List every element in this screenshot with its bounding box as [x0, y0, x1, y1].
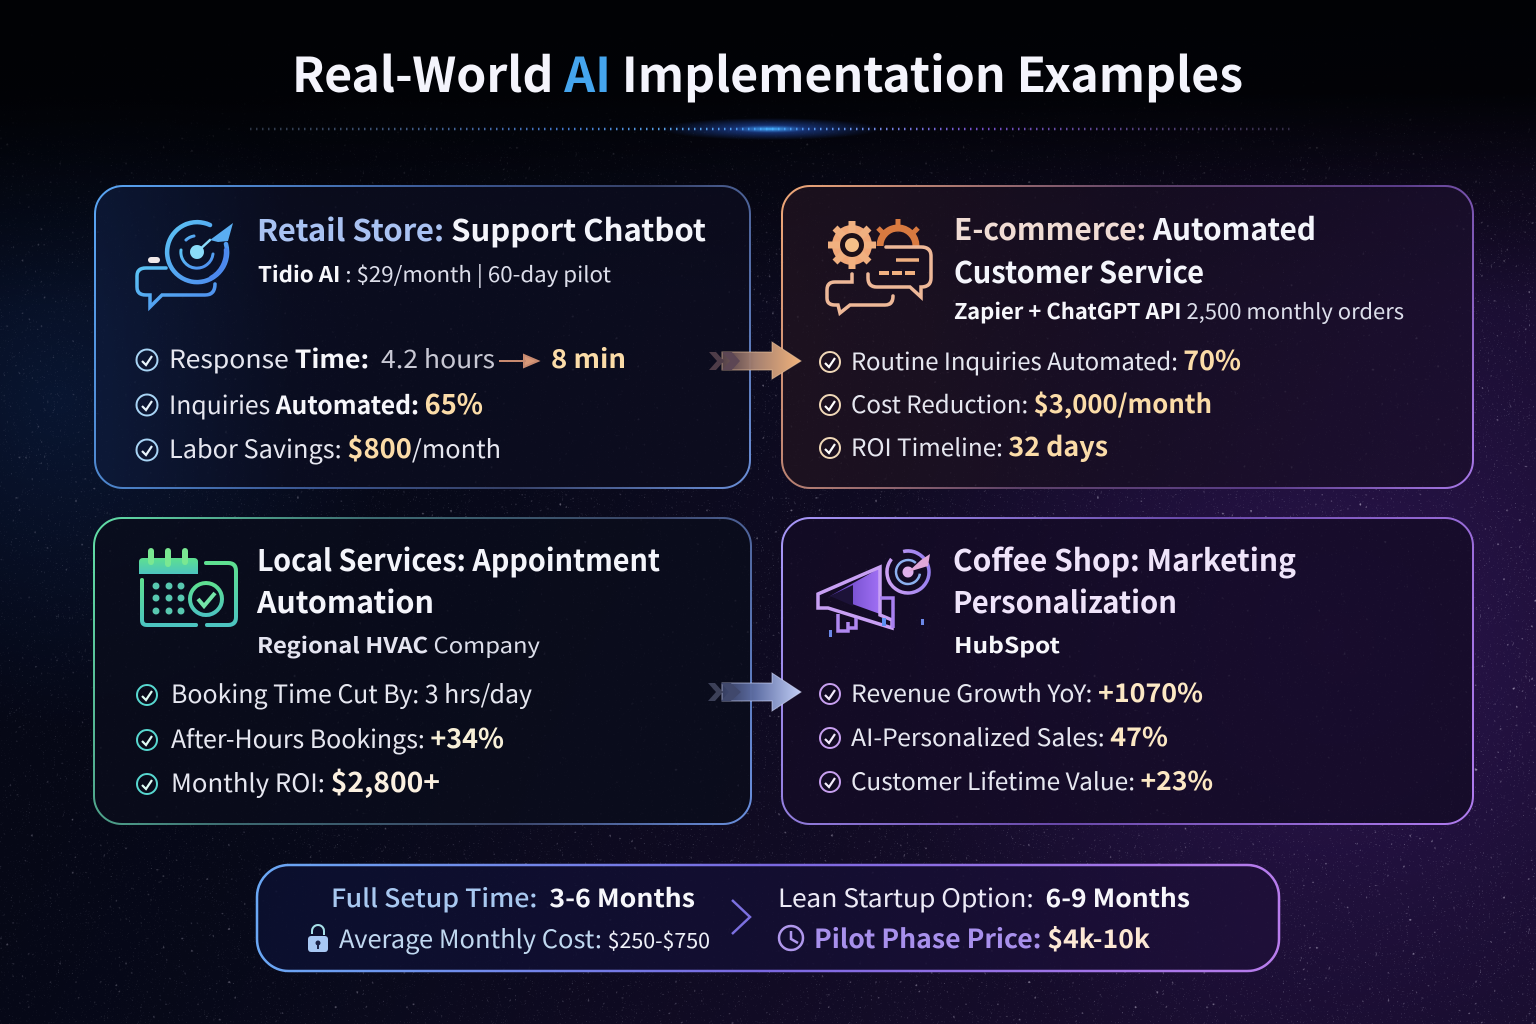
title: Real-World AI Implementation Examples: [292, 36, 1243, 106]
metric: booking time: Booking Time Cut By: 3 hrs/day: [171, 675, 532, 711]
metric: revenue growth: Revenue Growth YoY: +1070%: [851, 673, 1203, 710]
icon: calendar with check: [139, 551, 236, 625]
metric: customer lifetime value: Customer Lifetime Value: +23%: [851, 761, 1213, 798]
arrow: retail to e-commerce: [709, 342, 801, 379]
icon: lock: [308, 925, 328, 952]
metric: cost reduction: Cost Reduction: $3,000/month: [851, 384, 1212, 421]
tool and volume: Zapier + ChatGPT API 2,500 monthly orders: [954, 295, 1404, 326]
metric: after-hours bookings: After-Hours Bookings: +34%: [171, 717, 504, 756]
lean startup option: Lean Startup Option: 6-9 Months: [778, 879, 1190, 915]
icon: clock: [779, 926, 803, 950]
arrow: local services to coffee shop: [708, 673, 801, 711]
panel: e-commerce: [782, 186, 1473, 488]
company: Regional HVAC Company: [257, 629, 540, 660]
panel: retail store: [95, 186, 750, 488]
metric: response time: [136, 339, 626, 376]
panel: setup and cost summary: [257, 865, 1279, 971]
metric: response time: 8 min: [551, 339, 626, 376]
icon: target and chat bubble: [137, 222, 233, 307]
company: HubSpot: [954, 629, 1060, 660]
subtitle heading: Retail Store: Support Chatbot: [257, 206, 706, 250]
panel: coffee shop: [782, 518, 1473, 824]
pilot phase price: Pilot Phase Price: $4k-10k: [814, 919, 1150, 956]
heading line 2: Personalization: [953, 578, 1177, 622]
heading: E-commerce: Automated: [954, 205, 1316, 249]
metric: inquiries automated: Inquiries Automated: 65%: [169, 382, 483, 422]
heading line 2: Automation: [256, 578, 434, 622]
icon: gears and chat bubbles: [827, 219, 931, 313]
average monthly cost: Average Monthly Cost: $250-$750: [339, 920, 710, 956]
full setup time: Full Setup Time: 3-6 Months: [331, 879, 695, 915]
heading: Coffee Shop: Marketing: [953, 536, 1296, 580]
panel: local services: [94, 518, 751, 824]
metric: labor savings: Labor Savings: $800/month: [169, 427, 501, 466]
tool and price: Tidio AI : $29/month | 60-day pilot: [258, 258, 611, 289]
metric: monthly roi: Monthly ROI: $2,800+: [171, 760, 440, 800]
metric: response time: Response Time: 4.2 hours: [169, 340, 495, 376]
chevron: [732, 900, 750, 934]
heading line 2: Customer Service: [954, 248, 1204, 292]
metric: ai-personalized sales: AI-Personalized Sales: 47%: [851, 717, 1168, 754]
icon: megaphone and target: [818, 543, 937, 637]
metric: routine inquiries: Routine Inquiries Automated: 70%: [851, 339, 1241, 378]
metric: roi timeline: ROI Timeline: 32 days: [851, 425, 1108, 464]
heading: Local Services: Appointment: [257, 536, 660, 580]
